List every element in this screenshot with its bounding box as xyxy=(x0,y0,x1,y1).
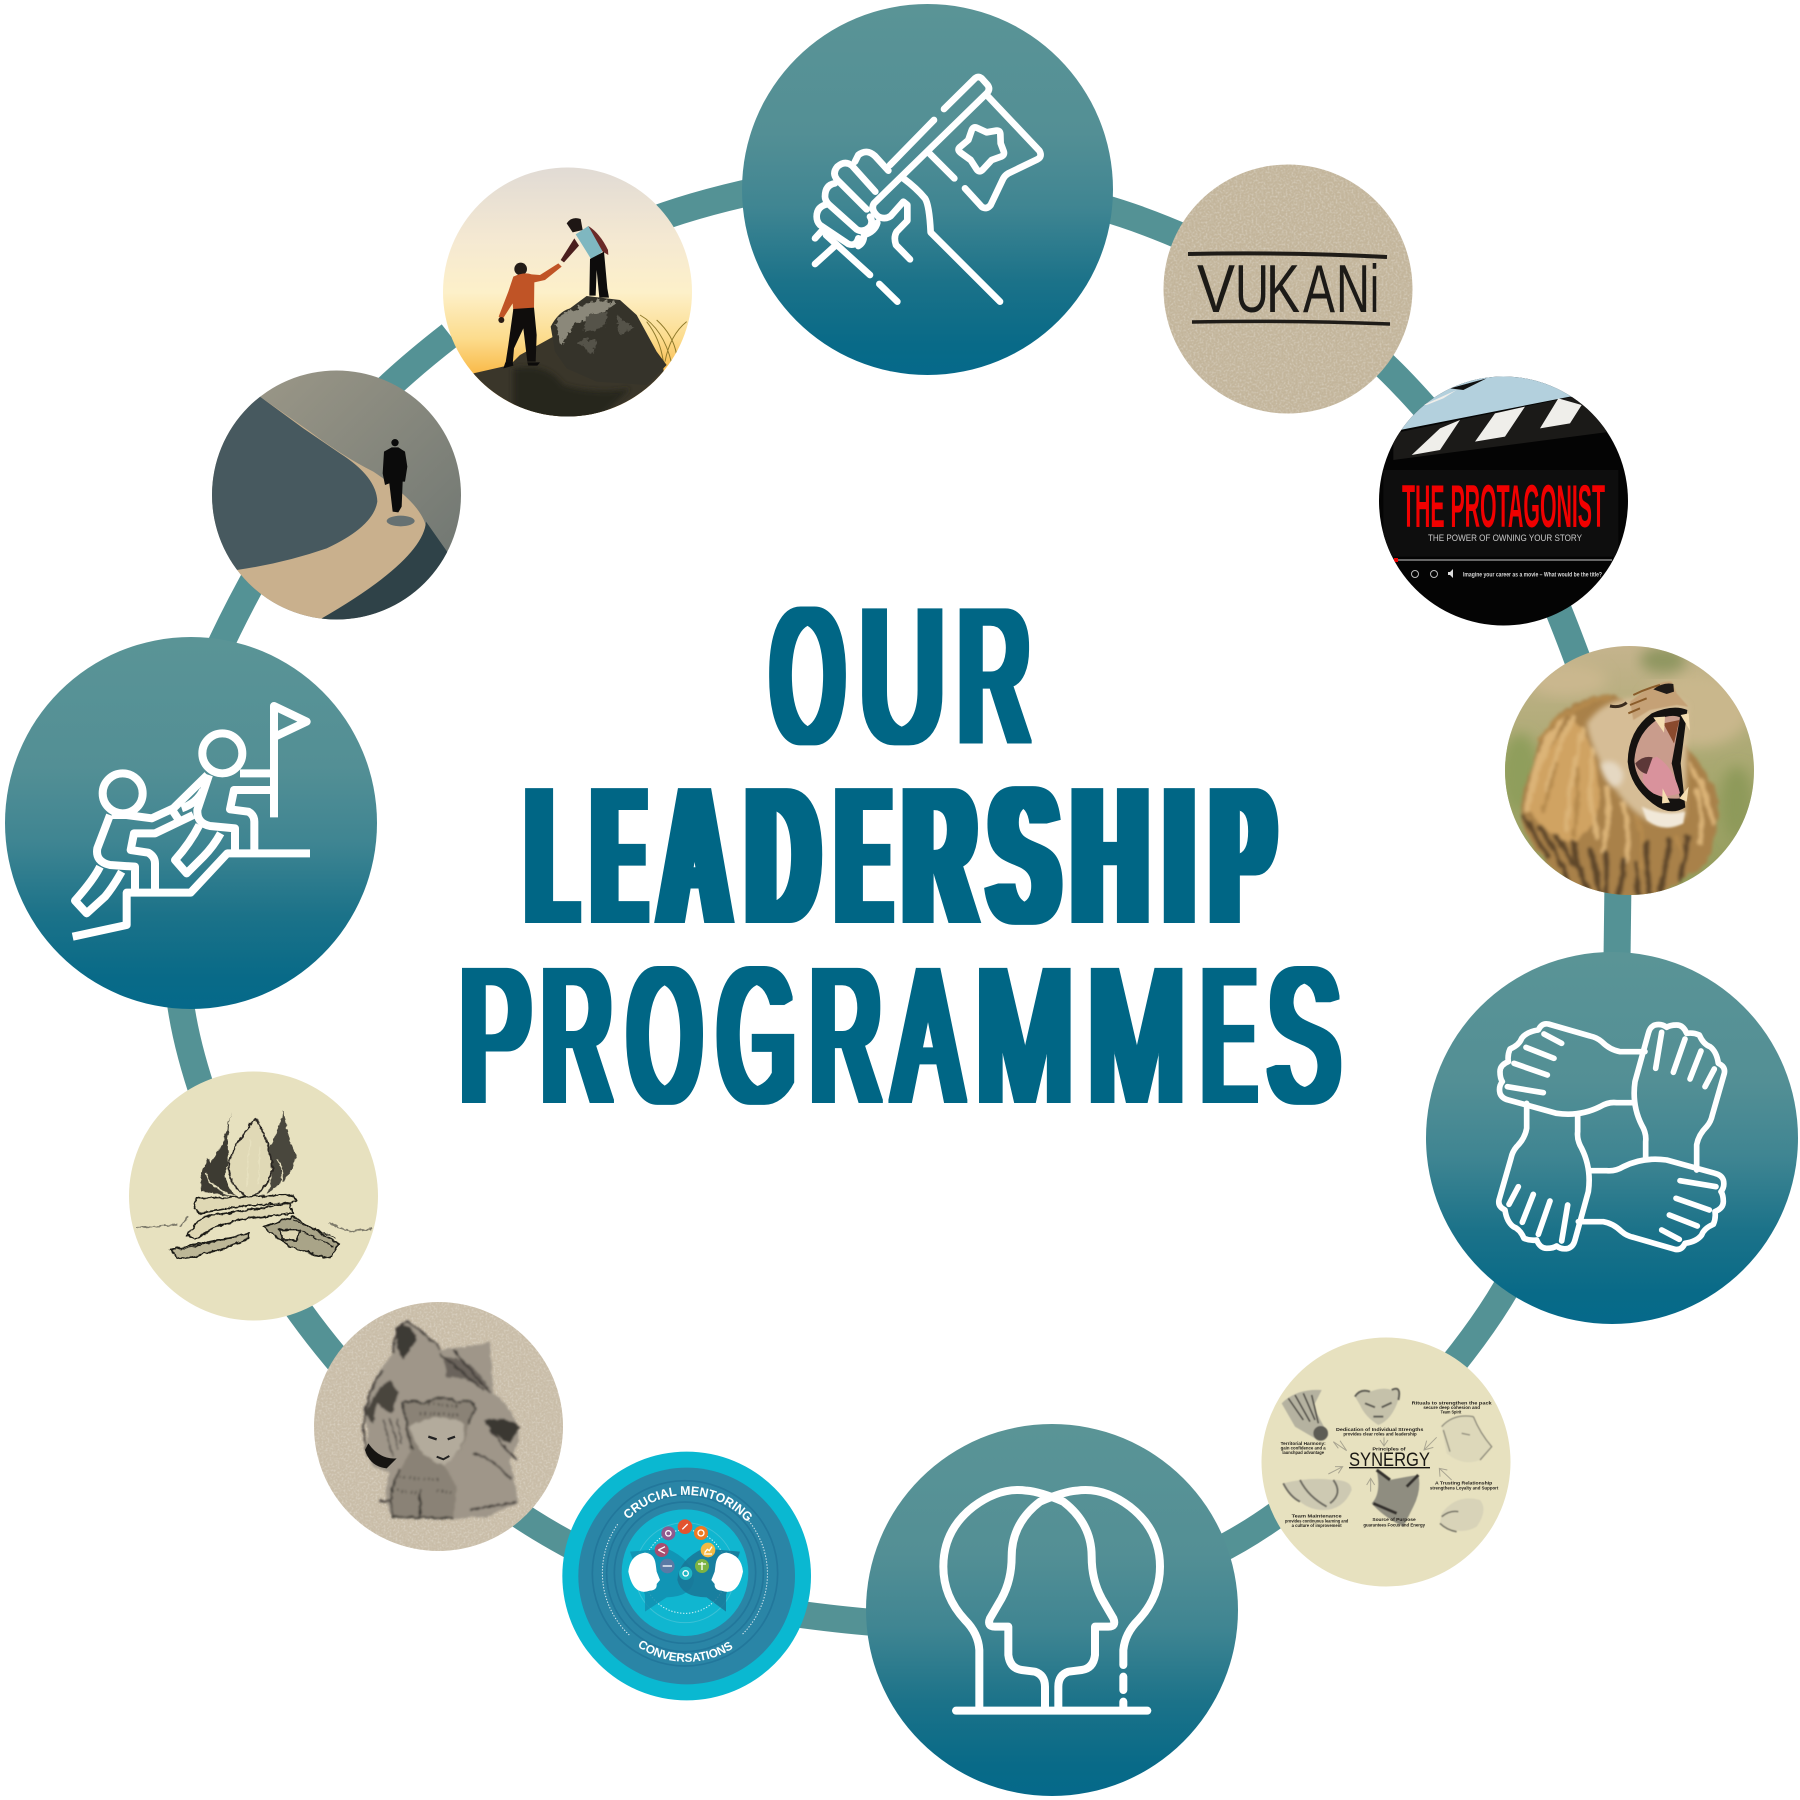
title line: PROGRAMMES: R xyxy=(542,928,612,1142)
photo circle: hand up on a rock at sunset xyxy=(440,165,695,422)
title line: PROGRAMMES: R xyxy=(811,928,880,1142)
lion outline xyxy=(1442,1416,1492,1462)
arrows xyxy=(1328,1437,1452,1492)
caption block: Team Maintenance xyxy=(1292,1513,1342,1518)
caption block: A Trusting Relationship xyxy=(1435,1480,1493,1485)
title line: LEADERSHIP: E xyxy=(594,746,644,965)
caption block: provides continuous learning and xyxy=(1285,1518,1349,1523)
caption block: strengthens Loyalty and Support xyxy=(1430,1486,1499,1491)
lower shadow xyxy=(320,522,448,627)
caption block xyxy=(1281,1400,1499,1528)
woman above xyxy=(561,218,609,298)
zebra xyxy=(1282,1390,1328,1441)
curved label: crucial mentoring xyxy=(628,1495,766,1562)
open mouth xyxy=(1628,708,1687,811)
caption block: gain confidence and a xyxy=(1281,1445,1326,1450)
nose xyxy=(1653,683,1674,694)
logs xyxy=(170,1195,338,1259)
dry grass xyxy=(640,315,687,363)
boulder xyxy=(551,296,667,385)
subtitle: THE POWER OF OWNING YOUR STORY xyxy=(1428,533,1583,544)
title line: PROGRAMMES: M xyxy=(1088,928,1185,1142)
hyena xyxy=(1440,1498,1483,1532)
VUKANi label: i xyxy=(1370,251,1379,327)
curved label: conversations xyxy=(637,1619,761,1662)
title line: PROGRAMMES: A xyxy=(895,928,961,1142)
mane xyxy=(1520,695,1719,897)
eye xyxy=(1610,703,1627,707)
caption block: provides clear roles and leadership xyxy=(1343,1431,1417,1436)
icon circle: hand holding flag xyxy=(742,4,1113,375)
caption block: secure deep cohesion and xyxy=(1423,1405,1480,1410)
title line: LEADERSHIP: E xyxy=(839,746,889,965)
elephant xyxy=(1283,1479,1352,1510)
title line: OUR: U xyxy=(860,568,944,783)
VUKANi label: V xyxy=(1197,251,1236,327)
ground xyxy=(473,337,670,422)
VUKANi label: K xyxy=(1266,251,1300,327)
wall xyxy=(210,368,463,622)
hand xyxy=(1634,1025,1725,1170)
right face xyxy=(711,1553,743,1592)
title line: LEADERSHIP: R xyxy=(905,746,975,965)
drawn rule bottom xyxy=(1192,321,1390,324)
face xyxy=(1587,690,1688,824)
title line: PROGRAMMES: P xyxy=(460,928,530,1142)
tongue xyxy=(1643,757,1680,796)
cub xyxy=(391,1398,475,1518)
badge: crucial mentoring conversations xyxy=(562,1452,811,1700)
caption block: Principles of xyxy=(1372,1447,1406,1452)
dune xyxy=(200,397,377,570)
wild dog xyxy=(1372,1470,1419,1527)
SYNERGY heading: SYNERGY xyxy=(1349,1450,1430,1471)
title line: LEADERSHIP: L xyxy=(528,746,575,965)
caption block: guarantees Focus and Energy xyxy=(1363,1523,1426,1528)
teeth xyxy=(1653,713,1690,803)
man below xyxy=(498,263,562,368)
caption block: Territorial Harmony: xyxy=(1281,1441,1326,1446)
cheetah xyxy=(1355,1389,1399,1425)
title line: LEADERSHIP xyxy=(528,746,1273,965)
topic icons xyxy=(655,1519,715,1580)
VUKANi label: N xyxy=(1336,251,1370,327)
caption block: a culture of improvement xyxy=(1292,1523,1342,1528)
icon circle: climbers helping each other xyxy=(5,637,377,1009)
badge: crucial mentoring conversations: CONVERSATIONS xyxy=(639,1640,732,1662)
title line: LEADERSHIP: D xyxy=(748,746,818,965)
photo circle: roaring lion xyxy=(1500,640,1760,900)
VUKANi label: U xyxy=(1235,251,1269,327)
title line: LEADERSHIP: A xyxy=(660,746,729,965)
hand xyxy=(1499,1103,1589,1249)
title xyxy=(460,568,1339,1142)
flames xyxy=(201,1108,295,1198)
title line: OUR: R xyxy=(959,568,1029,783)
caption block: Dedication of Individual Strengths xyxy=(1336,1427,1424,1432)
title line: OUR: O xyxy=(772,568,843,783)
title line: PROGRAMMES: O xyxy=(629,928,700,1142)
speech bubbles xyxy=(630,1548,694,1612)
title: P xyxy=(1212,746,1273,965)
caption block: Team Spirit xyxy=(1441,1409,1462,1414)
lioness body xyxy=(364,1322,520,1518)
left face xyxy=(628,1553,660,1592)
photo circle: The Protagonist clapperboard xyxy=(1375,373,1633,631)
sketch circle: principles of synergy xyxy=(1262,1338,1510,1586)
title line: PROGRAMMES: S xyxy=(1269,928,1339,1142)
title line: PROGRAMMES: G xyxy=(719,928,794,1142)
title line: PROGRAMMES xyxy=(460,928,1339,1142)
sketch circle: lioness and cub xyxy=(310,1298,568,1556)
drawn rule top xyxy=(1188,253,1387,257)
title line: OUR xyxy=(772,568,1029,783)
photo circle: figure walking a curved path xyxy=(200,368,463,627)
title line: LEADERSHIP: H xyxy=(1073,746,1147,965)
grass background xyxy=(1672,672,1746,750)
title line: PROGRAMMES: M xyxy=(976,928,1073,1142)
icon circle: four interlocked hands xyxy=(1426,952,1798,1324)
caption block: launchpad advantage xyxy=(1282,1450,1325,1455)
title line: LEADERSHIP: S xyxy=(990,746,1058,965)
badge: crucial mentoring conversations: CRUCIAL MENTORING xyxy=(624,1486,752,1521)
clapper band xyxy=(1393,397,1623,460)
walker xyxy=(383,439,407,512)
photo circle: VUKANI on paper xyxy=(1160,160,1416,416)
caption block: Source of Purpose xyxy=(1372,1517,1416,1522)
grass line xyxy=(137,1217,372,1232)
connecting ring xyxy=(180,190,1618,1623)
title line: LEADERSHIP: I xyxy=(1166,746,1193,965)
hand xyxy=(1578,1159,1724,1250)
path xyxy=(233,397,426,623)
dotted arcs xyxy=(602,1518,767,1635)
icon circle: two overlapping heads xyxy=(866,1424,1238,1796)
title line: PROGRAMMES: E xyxy=(1203,928,1254,1142)
hand xyxy=(1500,1024,1645,1114)
title panel xyxy=(1383,470,1618,557)
player caption: Imagine your career as a movie – What would be the title? xyxy=(1463,572,1602,578)
VUKANi label: A xyxy=(1303,251,1335,327)
progress bar xyxy=(1394,558,1612,562)
sky xyxy=(1402,376,1572,430)
caption block: Rituals to strengthen the pack xyxy=(1412,1400,1492,1405)
sketch circle: campfire xyxy=(125,1068,383,1326)
